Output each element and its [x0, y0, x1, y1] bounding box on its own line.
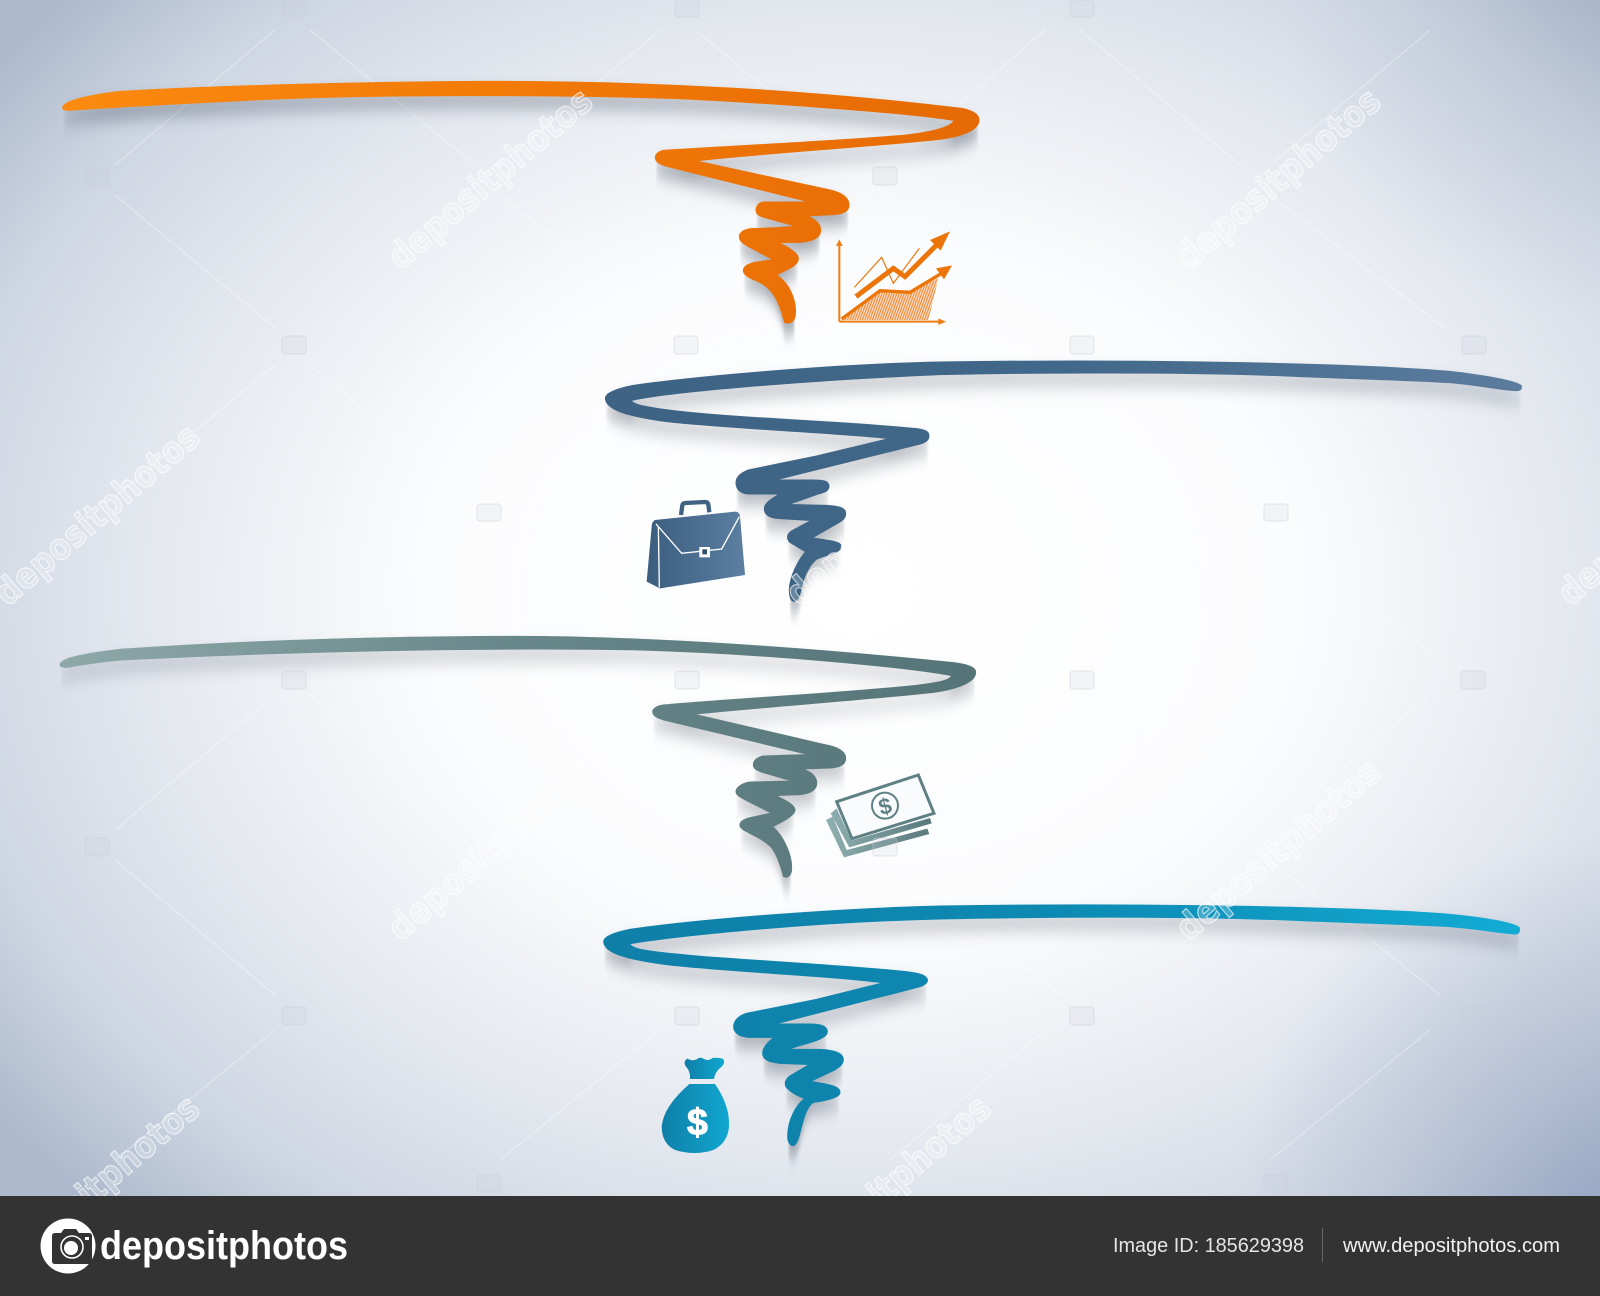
- ribbon: grey teal squiggle: [61, 637, 975, 876]
- money bag body: [662, 1084, 729, 1153]
- cash top note: [837, 775, 934, 839]
- watermark text: depositphotos: [778, 416, 999, 614]
- icon: growth chart: [836, 231, 952, 325]
- shadows of the ribbons: [61, 93, 1521, 1156]
- footer logo wordmark: depositphotos: [100, 1224, 348, 1268]
- icon: briefcase: [647, 502, 745, 588]
- cash lower notes: [826, 808, 932, 857]
- ribbon: blue squiggle: [604, 906, 1519, 1145]
- footer bar: [0, 1196, 1600, 1296]
- ribbon: orange squiggle: [63, 82, 978, 322]
- footer website: www.depositphotos.com: [1342, 1235, 1560, 1257]
- icon: stack of cash: [826, 775, 934, 857]
- money bag neck: [685, 1058, 724, 1079]
- watermark lattice lines: [115, 30, 1445, 1160]
- chart arrow heads: [930, 231, 952, 279]
- watermark text: depositphotos: [380, 80, 601, 278]
- chart trend lines: [842, 245, 942, 319]
- briefcase clasp: [699, 547, 710, 557]
- watermark text: depositphotos: [1168, 80, 1389, 278]
- briefcase flap lines: [656, 517, 739, 587]
- cash dollar seal: $: [876, 792, 895, 820]
- ribbon: slate squiggle: [606, 362, 1521, 601]
- icon: money bag: [662, 1058, 729, 1153]
- chart axes: [836, 239, 946, 325]
- footer image id: Image ID: 185629398: [1113, 1235, 1304, 1257]
- footer logo camera icon: [40, 1218, 96, 1274]
- money bag dollar sign: $: [687, 1101, 708, 1143]
- footer divider: [1322, 1228, 1323, 1262]
- watermark text: depositphotos: [778, 1087, 999, 1285]
- watermark text: depositphotos: [1168, 751, 1389, 949]
- briefcase body: [647, 512, 745, 588]
- chart hatched area: [842, 278, 938, 320]
- briefcase handle: [681, 502, 709, 515]
- watermark text: depositphotos: [380, 751, 601, 949]
